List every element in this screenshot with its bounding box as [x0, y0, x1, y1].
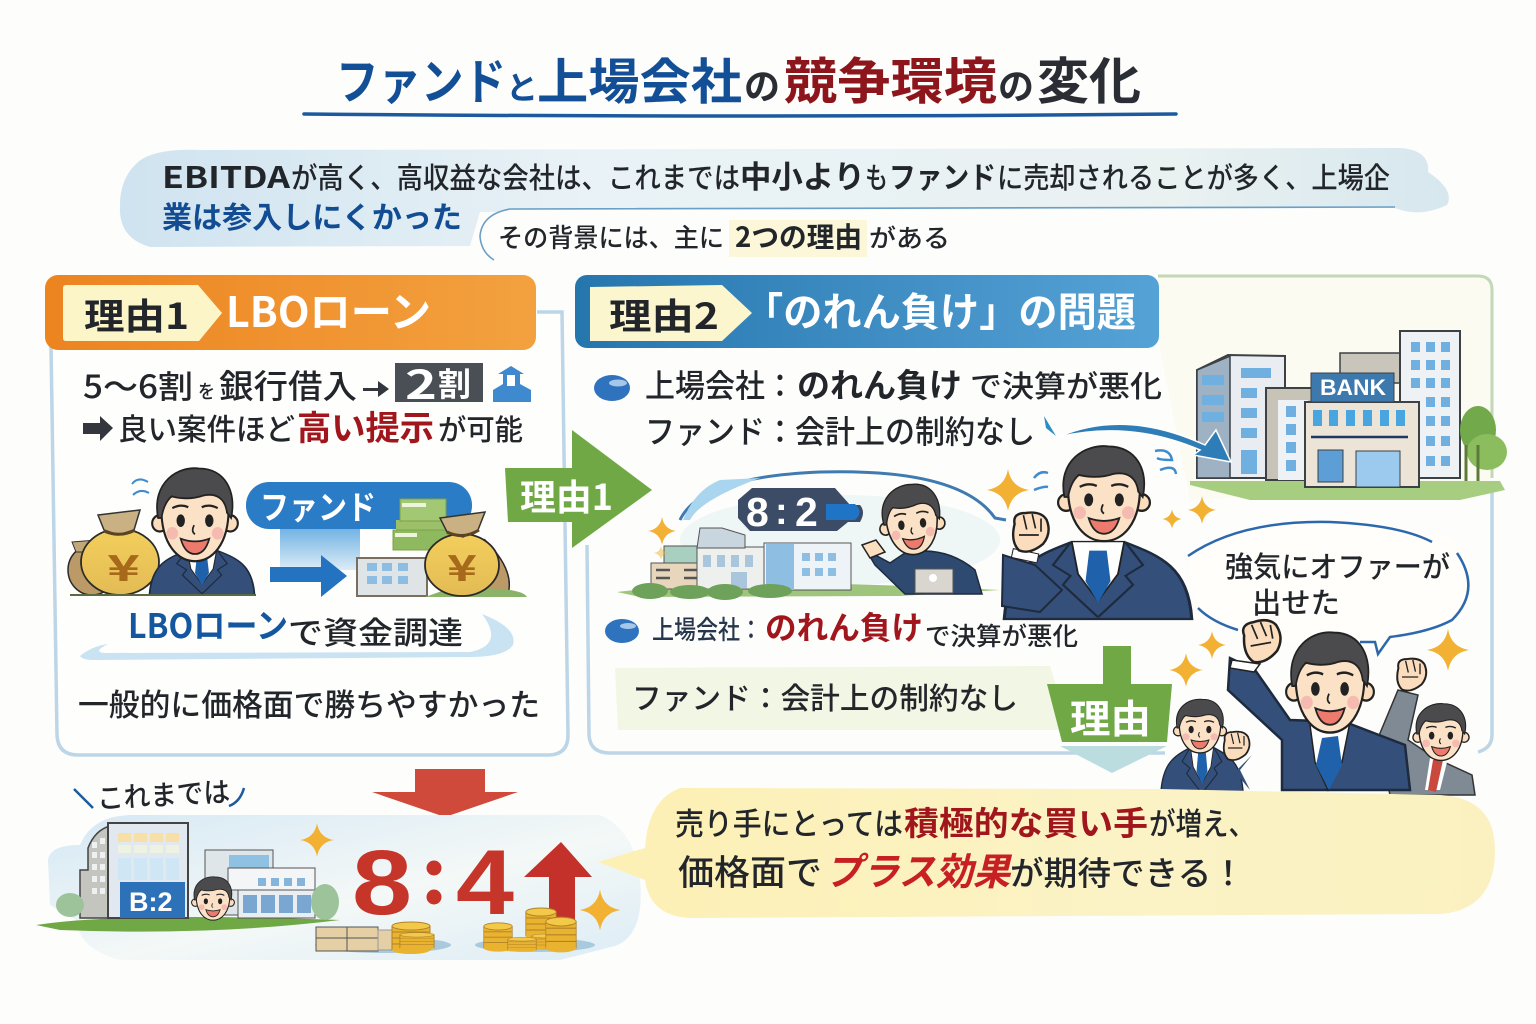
reason 2 header: 「のれん負け」の問題 [744, 280, 1136, 338]
icon: big man with fist [987, 446, 1216, 619]
reason 1 text: 高い提示 [297, 401, 434, 450]
icon: big man cheering [1169, 618, 1469, 790]
sub-callout: 2つの理由 [735, 216, 862, 256]
reason 1 header: 理由1 [84, 288, 189, 340]
intro text: に売却されることが多く、上場企 [997, 155, 1390, 197]
ratio 8:4: 4 [456, 832, 514, 934]
second statement: で決算が悪化 [925, 617, 1078, 653]
icon: small man with laptop [862, 481, 982, 594]
speech bubble: 強気にオファーが [1225, 544, 1450, 586]
LBO caption: で資金調達 [288, 608, 463, 653]
title: と [506, 63, 538, 109]
sub-callout: その背景には、主に [498, 218, 724, 255]
reason 2 text: のれん負け [797, 359, 962, 407]
LBO caption [80, 599, 514, 660]
intro panel [120, 148, 1449, 262]
intro text: 中小より [740, 152, 865, 197]
fund statement band [615, 666, 1070, 730]
reason 1 header [45, 275, 536, 350]
callout text [675, 797, 1255, 896]
icon: bank building: BANK [1320, 375, 1386, 400]
reason 1 text: 2 [405, 353, 437, 411]
callout text: 価格面で [678, 845, 822, 896]
ratio 8:4 [352, 832, 514, 934]
reason 1 text: を [198, 377, 215, 404]
reason 1 text [83, 353, 523, 450]
intro text: が高く、高収益な会社は、これまでは [291, 155, 740, 197]
title [304, 42, 1176, 116]
icon: blue bank block [493, 366, 531, 402]
intro text: ファンド [889, 153, 996, 197]
callout text: 売り手にとっては [675, 799, 903, 844]
reason 1 text: が可能 [438, 407, 523, 449]
reason 1 text: 銀行借入 [219, 360, 357, 408]
title: 上場会社 [537, 43, 742, 114]
fund pill [246, 481, 472, 570]
ratio 8:4: 8 [352, 832, 412, 934]
conclusion text: 一般的に価格面で勝ちやすかった [78, 680, 540, 725]
fund pill: ファンド [260, 481, 376, 529]
second statement: のれん負け [765, 603, 923, 649]
badge: 8:2: : [775, 491, 788, 533]
intro text: も [865, 155, 888, 197]
badge: 8:2: 8 [746, 489, 769, 535]
LBO caption: LBOローン [128, 599, 288, 648]
icon: worried man with fund [70, 468, 256, 596]
arrow: red down [372, 769, 518, 817]
sub-callout: がある [869, 219, 950, 255]
speech bubble [1188, 520, 1472, 658]
arrow: reason 1 [505, 430, 652, 548]
callout text: が期待できる！ [1010, 847, 1245, 895]
fund statement band: ファンド：会計上の制約なし [632, 674, 1018, 718]
title: の [744, 58, 780, 110]
panel: reason 2 [575, 275, 1507, 795]
icon: money bag right [425, 512, 527, 597]
title: の [998, 58, 1034, 110]
badge: 8:2 [738, 488, 863, 535]
icon: small man right cheering [1378, 659, 1475, 795]
reason 1 text: 割 [438, 358, 471, 406]
icon: money bags left [68, 510, 159, 595]
illustration: listed company scene [617, 472, 1006, 600]
icon: small face [192, 877, 234, 920]
reason 1 header: LBOローン [226, 279, 431, 340]
icon: company buildings [36, 823, 340, 932]
reason 2 header: 理由2 [609, 288, 719, 340]
arrow: reason down: 理由 [1070, 689, 1151, 745]
icon: company buildings: B:2 [129, 887, 173, 917]
intro text: 業は参入しにくかった [162, 193, 462, 237]
callout: conclusion [598, 788, 1495, 918]
icon: money bag right: ¥ [447, 540, 477, 592]
reason 2 text [594, 359, 1162, 453]
icon: curved arrow to bank [1044, 416, 1231, 462]
panel: before scene [36, 771, 641, 960]
intro text: EBITDA [162, 153, 291, 197]
title: ファンド [336, 43, 506, 114]
arrow: reason 1: 理由1 [520, 469, 613, 521]
sub-callout [480, 207, 1395, 262]
speech bubble: 出せた [1252, 580, 1340, 622]
callout text: が増え、 [1149, 799, 1255, 844]
icon: fund building with stacks [357, 499, 456, 596]
reason 1 text: 5〜6割 [83, 362, 193, 408]
arrow: reason down [1047, 646, 1172, 773]
icon: bank building [1190, 331, 1507, 500]
second statement: 上場会社： [652, 610, 762, 647]
icon: coins and cash [315, 890, 620, 954]
callout text: プラス効果 [825, 841, 1013, 896]
reason 2 text: ファンド：会計上の制約なし [645, 407, 1035, 453]
reason 2 text: で決算が悪化 [970, 362, 1162, 406]
title: 変化 [1037, 42, 1141, 114]
reason 2 text: 上場会社： [645, 361, 795, 407]
icon: money bags left: ¥ [107, 540, 140, 592]
title: 競争環境 [784, 42, 997, 114]
label: before: これまでは [96, 771, 231, 817]
panel: reason 1 [45, 275, 568, 755]
icon: blue arrow [270, 555, 347, 597]
intro text [162, 152, 1390, 237]
icon: small man left cheering [1161, 699, 1252, 794]
badge: 8:2: 2 [795, 489, 818, 535]
reason 2 header [575, 275, 1159, 348]
second statement [605, 603, 1078, 653]
arrow: up [524, 842, 592, 922]
reason 1 text: 良い案件ほど [118, 405, 295, 449]
callout text: 積極的な買い手 [904, 797, 1148, 845]
